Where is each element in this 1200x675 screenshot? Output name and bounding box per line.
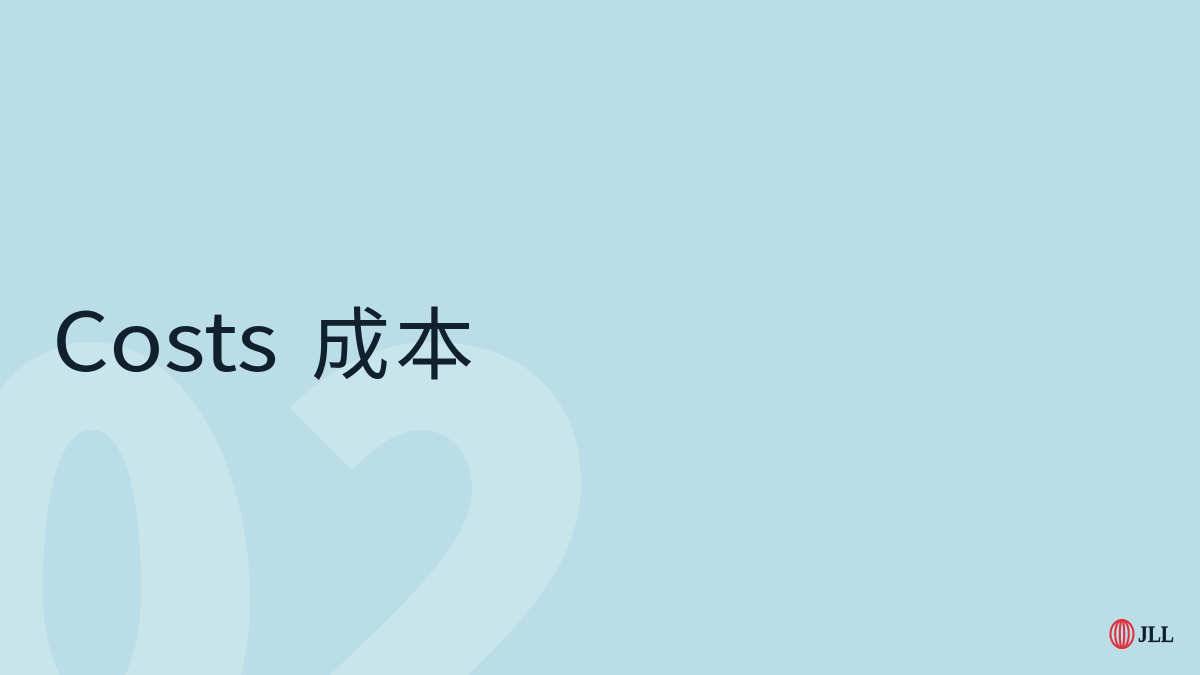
title (52, 278, 479, 396)
title: Costs (52, 278, 279, 395)
title: 成本 (311, 281, 479, 396)
icon: red globe (1110, 620, 1134, 648)
numeral 0 (0, 342, 250, 675)
JLL logo (1109, 619, 1174, 649)
numeral 2 (290, 342, 581, 675)
